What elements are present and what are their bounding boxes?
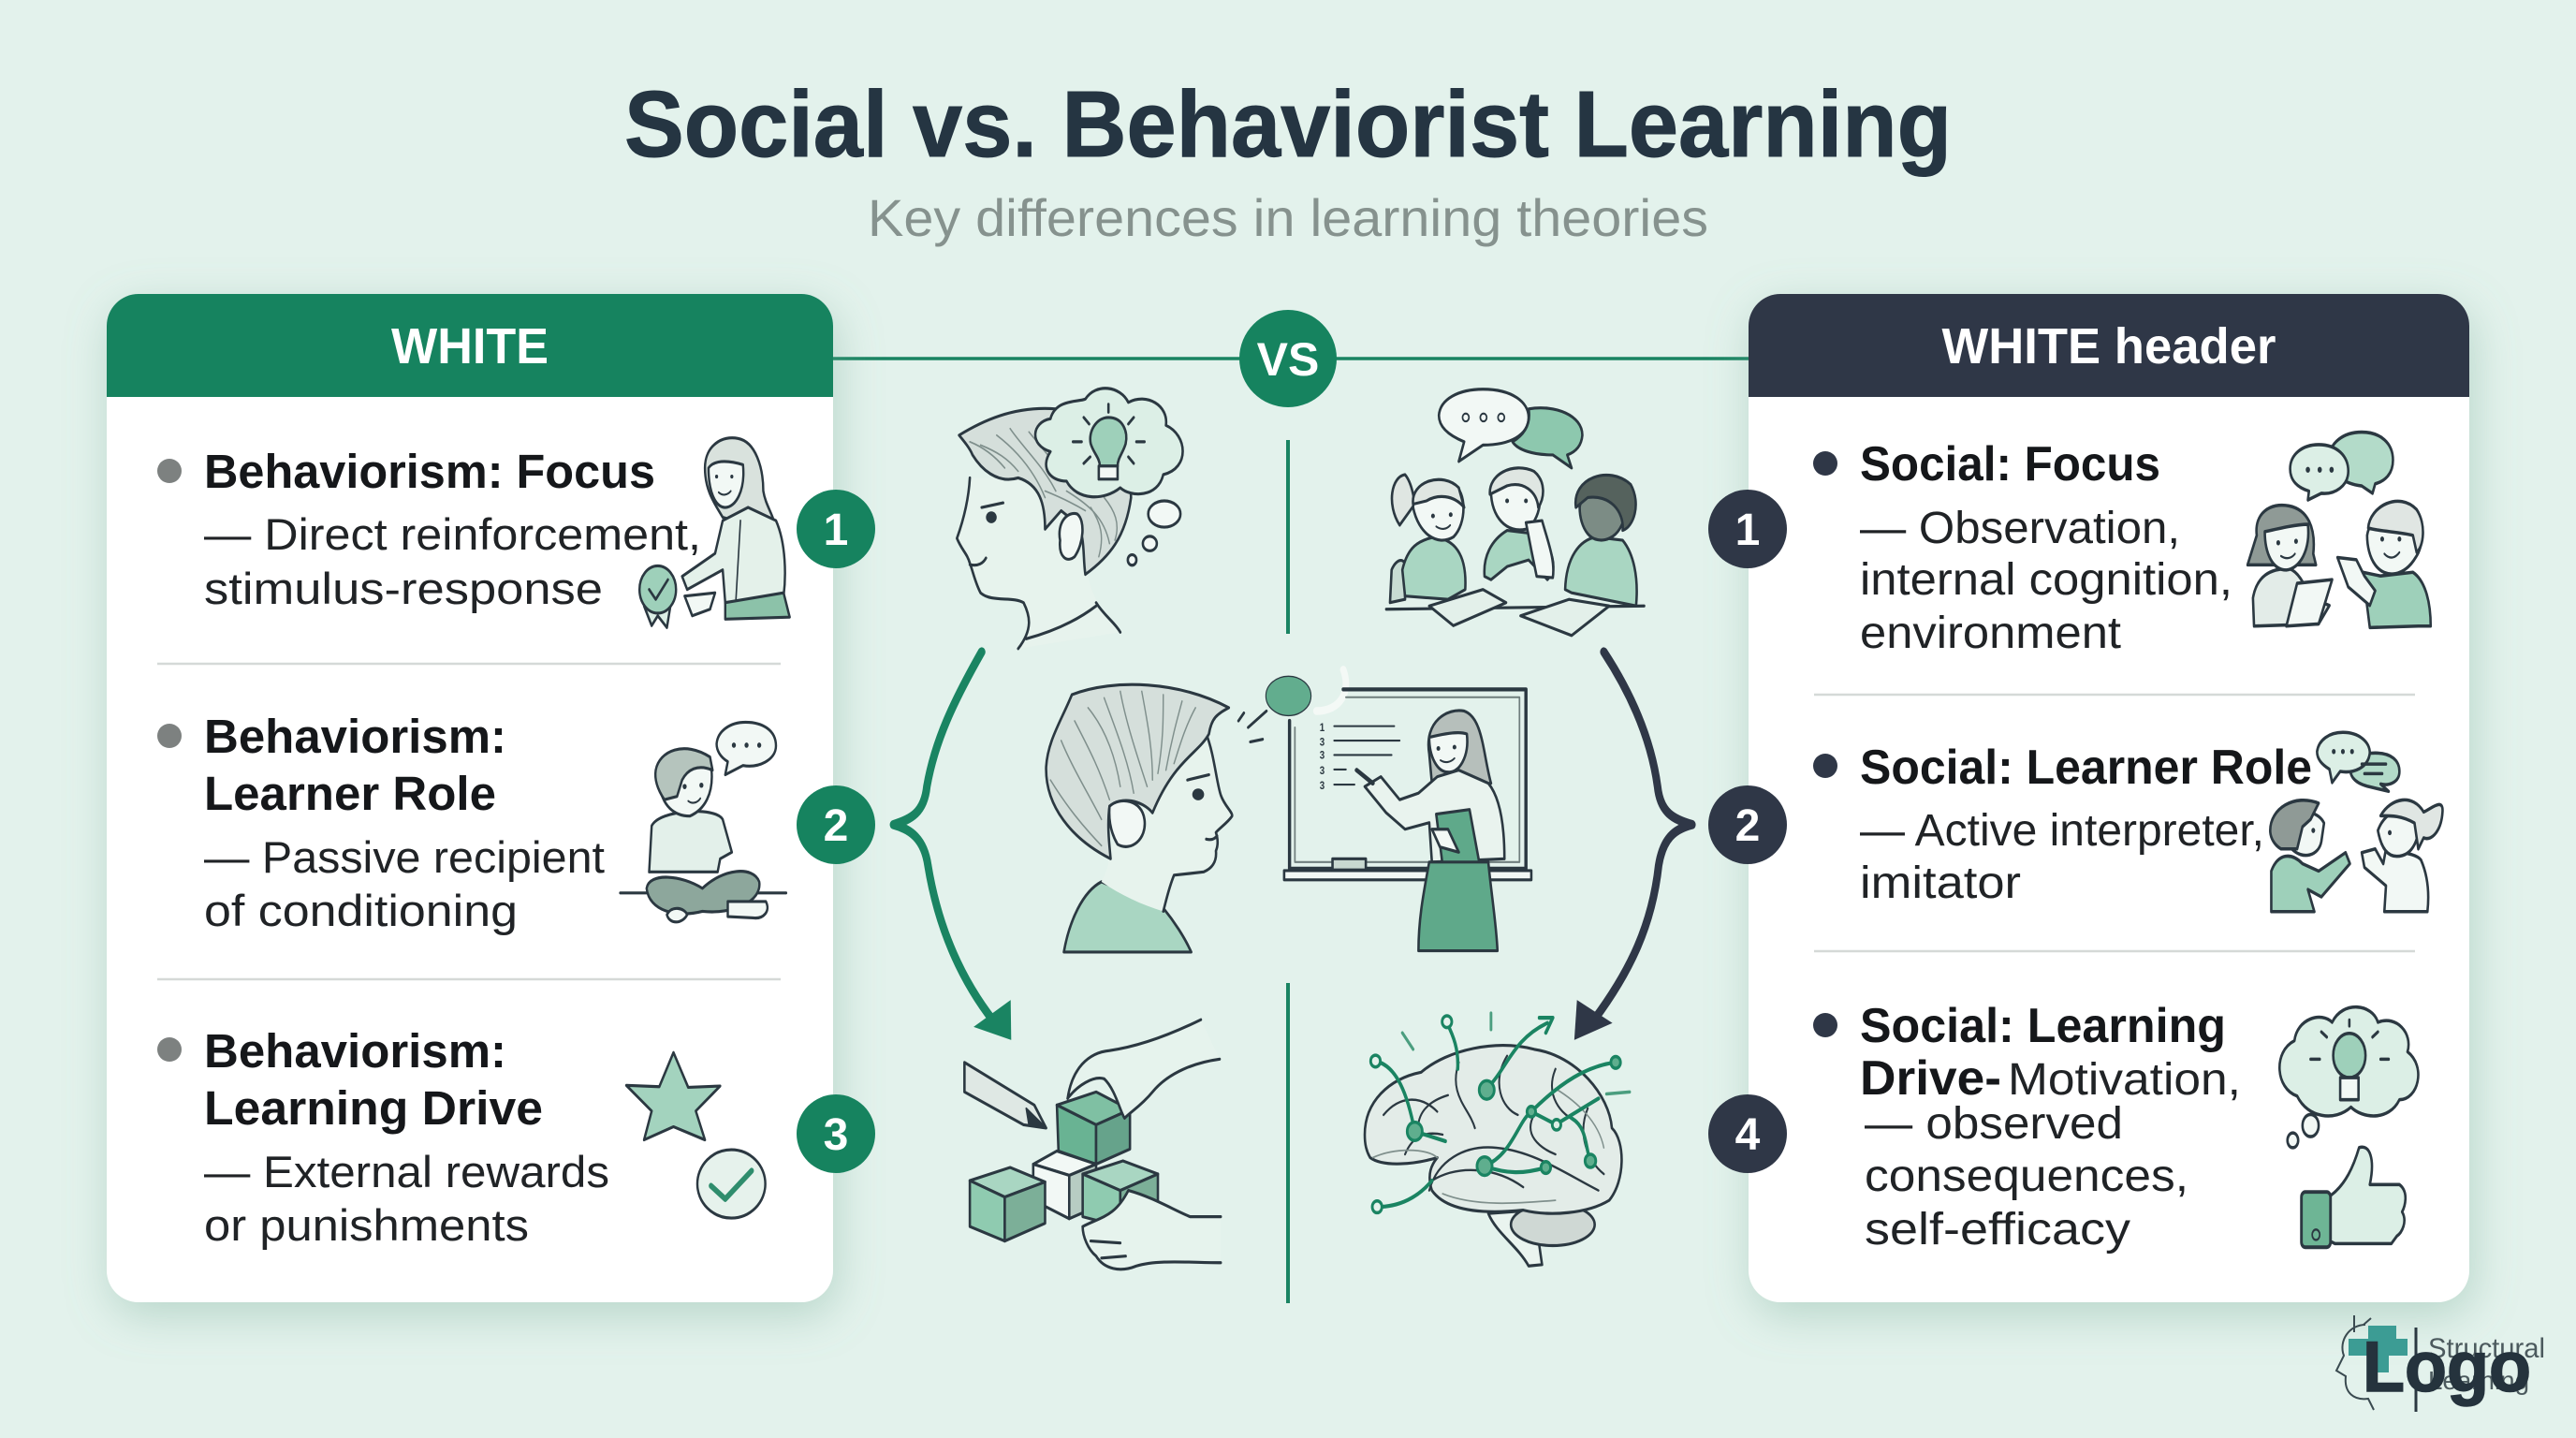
logo: Logo: [2363, 1328, 2531, 1407]
item: behaviorism learner role: Learner Role: [204, 767, 496, 820]
item: social learner role: Social: Learner Role: [1860, 741, 2312, 795]
icon: check mark: [697, 1150, 766, 1218]
VS badge: VS: [1257, 333, 1319, 386]
title: Social vs. Behaviorist Learning: [624, 72, 1952, 177]
number badge: right 2: [1708, 785, 1787, 864]
panel header: social: [1749, 294, 2469, 397]
item: social focus: — Observation,: [1860, 504, 2180, 553]
item: behaviorism learning drive: Behaviorism:: [204, 1024, 506, 1078]
illustration: children discussing at table: [1386, 389, 1644, 636]
item: behaviorism learning drive: Learning Drive: [204, 1081, 543, 1135]
number badge: right 1: 1: [1735, 506, 1760, 555]
number badge: right 2: 2: [1735, 801, 1760, 851]
logo: Learning: [2428, 1366, 2529, 1395]
panel header: social: WHITE header: [1941, 318, 2276, 374]
illustration: teacher at whiteboard: 3: [1320, 780, 1325, 792]
number badge: right 4: [1708, 1094, 1787, 1173]
item: behaviorism learning drive: or punishments: [204, 1200, 529, 1250]
item: social learning drive: — observed: [1865, 1099, 2123, 1149]
number badge: left 1: [797, 490, 875, 568]
item: social learning drive: Social: Learning: [1860, 999, 2226, 1053]
item: social learning drive: self-efficacy: [1865, 1205, 2130, 1255]
connector line to VS badge: [828, 357, 1752, 360]
item: behaviorism learner role: — Passive recipient: [204, 832, 605, 882]
icon: two children talking: [2247, 433, 2431, 627]
number badge: left 2: [797, 785, 875, 864]
number badge: right 1: [1708, 490, 1787, 568]
item: social learner role: imitator: [1860, 858, 2021, 908]
item: social focus: internal cognition,: [1860, 555, 2232, 605]
subtitle: Key differences in learning theories: [868, 188, 1708, 247]
item: social learning drive: Motivation,: [2008, 1055, 2241, 1105]
icon: thumbs up: [2302, 1147, 2406, 1247]
icon: lightbulb thought cloud: [2279, 1007, 2418, 1148]
panel: social: [1749, 294, 2469, 1302]
number badge: right 4: 4: [1735, 1110, 1761, 1160]
item: social learner role: — Active interpreter,: [1860, 806, 2264, 856]
center illustrations: [894, 389, 1692, 1269]
icon: children imitating: [2270, 732, 2442, 912]
illustration: hands stacking blocks: [964, 1020, 1221, 1269]
illustration: brain with neural connections: [1365, 1013, 1630, 1266]
item: behaviorism focus: [157, 445, 701, 613]
number badge: left 3: [797, 1094, 875, 1173]
illustration: teacher at whiteboard: 1: [1320, 722, 1325, 735]
item: social focus: Social: Focus: [1860, 437, 2160, 492]
panel header: behaviorism: [107, 294, 833, 397]
panel header: behaviorism: WHITE: [391, 318, 549, 374]
illustration: boy with lightbulb thought: [957, 389, 1183, 649]
item: social learning drive: Drive-: [1860, 1051, 2001, 1106]
item: behaviorism learner role: Behaviorism:: [204, 710, 506, 763]
illustration: teacher at whiteboard: 3: [1320, 737, 1325, 749]
arrow: behaviorist bracket: [894, 652, 1011, 1040]
number badge: left 3: 3: [824, 1110, 848, 1160]
arrow: social bracket: [1574, 652, 1692, 1040]
panel: behaviorism: [107, 294, 833, 1302]
illustration: teacher at whiteboard: [1284, 689, 1531, 951]
item: behaviorism learning drive: — External rewards: [204, 1147, 609, 1196]
icon: seated boy with speech bubble: [621, 722, 786, 922]
icon: teacher with medal: [639, 438, 790, 627]
item: social learner role: [1813, 741, 2312, 908]
item: behaviorism learner role: [157, 710, 605, 935]
illustration: teacher at whiteboard: 3: [1320, 750, 1325, 762]
item: behaviorism focus: stimulus-response: [204, 564, 603, 613]
number badge: left 2: 2: [824, 801, 848, 851]
item: behaviorism learning drive: [157, 1024, 609, 1250]
number badge: left 1: 1: [824, 506, 848, 555]
item: social learning drive: [1813, 999, 2241, 1255]
icon: star: [626, 1052, 720, 1140]
logo: Structural: [2428, 1333, 2545, 1364]
item: social learning drive: consequences,: [1865, 1152, 2188, 1201]
item: behaviorism focus: — Direct reinforcement,: [204, 509, 701, 559]
VS badge: [1239, 310, 1337, 407]
item: social focus: environment: [1860, 609, 2121, 658]
illustration: boy looking at teacher: [1046, 669, 1346, 952]
illustration: teacher at whiteboard: 3: [1320, 765, 1325, 777]
item: behaviorism focus: Behaviorism: Focus: [204, 445, 655, 498]
logo: [2336, 1315, 2545, 1412]
item: behaviorism learner role: of conditioning: [204, 886, 518, 935]
item: social focus: [1813, 437, 2232, 658]
